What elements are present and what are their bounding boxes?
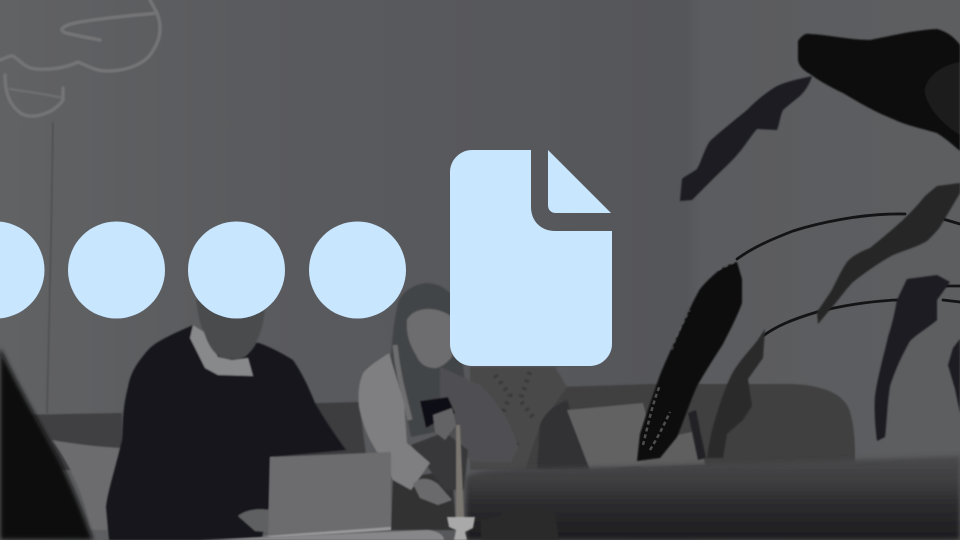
laptop xyxy=(263,452,391,538)
cushion right xyxy=(567,403,660,470)
plant behind the woman xyxy=(470,367,567,470)
sofa back middle xyxy=(274,402,366,460)
cushion left xyxy=(52,440,122,530)
sofa xyxy=(20,384,855,470)
leaf: right lower xyxy=(875,275,950,441)
leaf: far right edge xyxy=(948,339,960,413)
hair xyxy=(391,283,470,437)
leaf fold xyxy=(925,62,960,135)
hand on knee xyxy=(413,479,452,505)
dot 3 xyxy=(188,222,285,318)
sofa arm xyxy=(537,400,590,470)
loading dots xyxy=(0,222,406,318)
sofa back right xyxy=(520,384,855,470)
plant leaves xyxy=(637,29,960,461)
foreground blurred shoulder xyxy=(0,348,93,540)
hand xyxy=(238,509,269,532)
dot 1 xyxy=(0,222,44,318)
sofa arm and cushions xyxy=(52,400,705,530)
leaf: stem at sofa xyxy=(688,410,706,460)
leaf highlights xyxy=(643,262,735,450)
leaf: central large xyxy=(637,262,742,461)
candle holder xyxy=(447,517,475,540)
leaf: top right xyxy=(798,29,960,151)
sofa back left xyxy=(20,413,122,470)
jacket left xyxy=(358,353,430,490)
sweater xyxy=(106,325,346,540)
candle stick xyxy=(456,425,464,517)
table xyxy=(200,530,444,540)
legs xyxy=(391,470,456,530)
face xyxy=(196,300,265,359)
leaf: upper drooping xyxy=(680,76,812,201)
knee xyxy=(411,432,468,490)
leaf: central small xyxy=(707,329,765,458)
hand with mug xyxy=(433,408,456,440)
neon sign on wall xyxy=(0,0,160,413)
table and items xyxy=(200,425,559,540)
glass ornament xyxy=(481,506,559,540)
person: woman with mug xyxy=(358,283,518,530)
plant stems xyxy=(737,214,960,336)
foreground blurred table edge xyxy=(466,456,960,540)
hair highlights xyxy=(395,345,410,420)
icon: document xyxy=(450,150,612,366)
face xyxy=(407,309,452,368)
dot 2 xyxy=(68,222,165,318)
dot 4 xyxy=(309,222,406,318)
jacket right xyxy=(440,367,518,462)
person: man in dark sweater xyxy=(106,300,346,540)
collar xyxy=(190,325,253,376)
mug xyxy=(420,397,455,428)
leaf: right middle xyxy=(817,183,960,324)
